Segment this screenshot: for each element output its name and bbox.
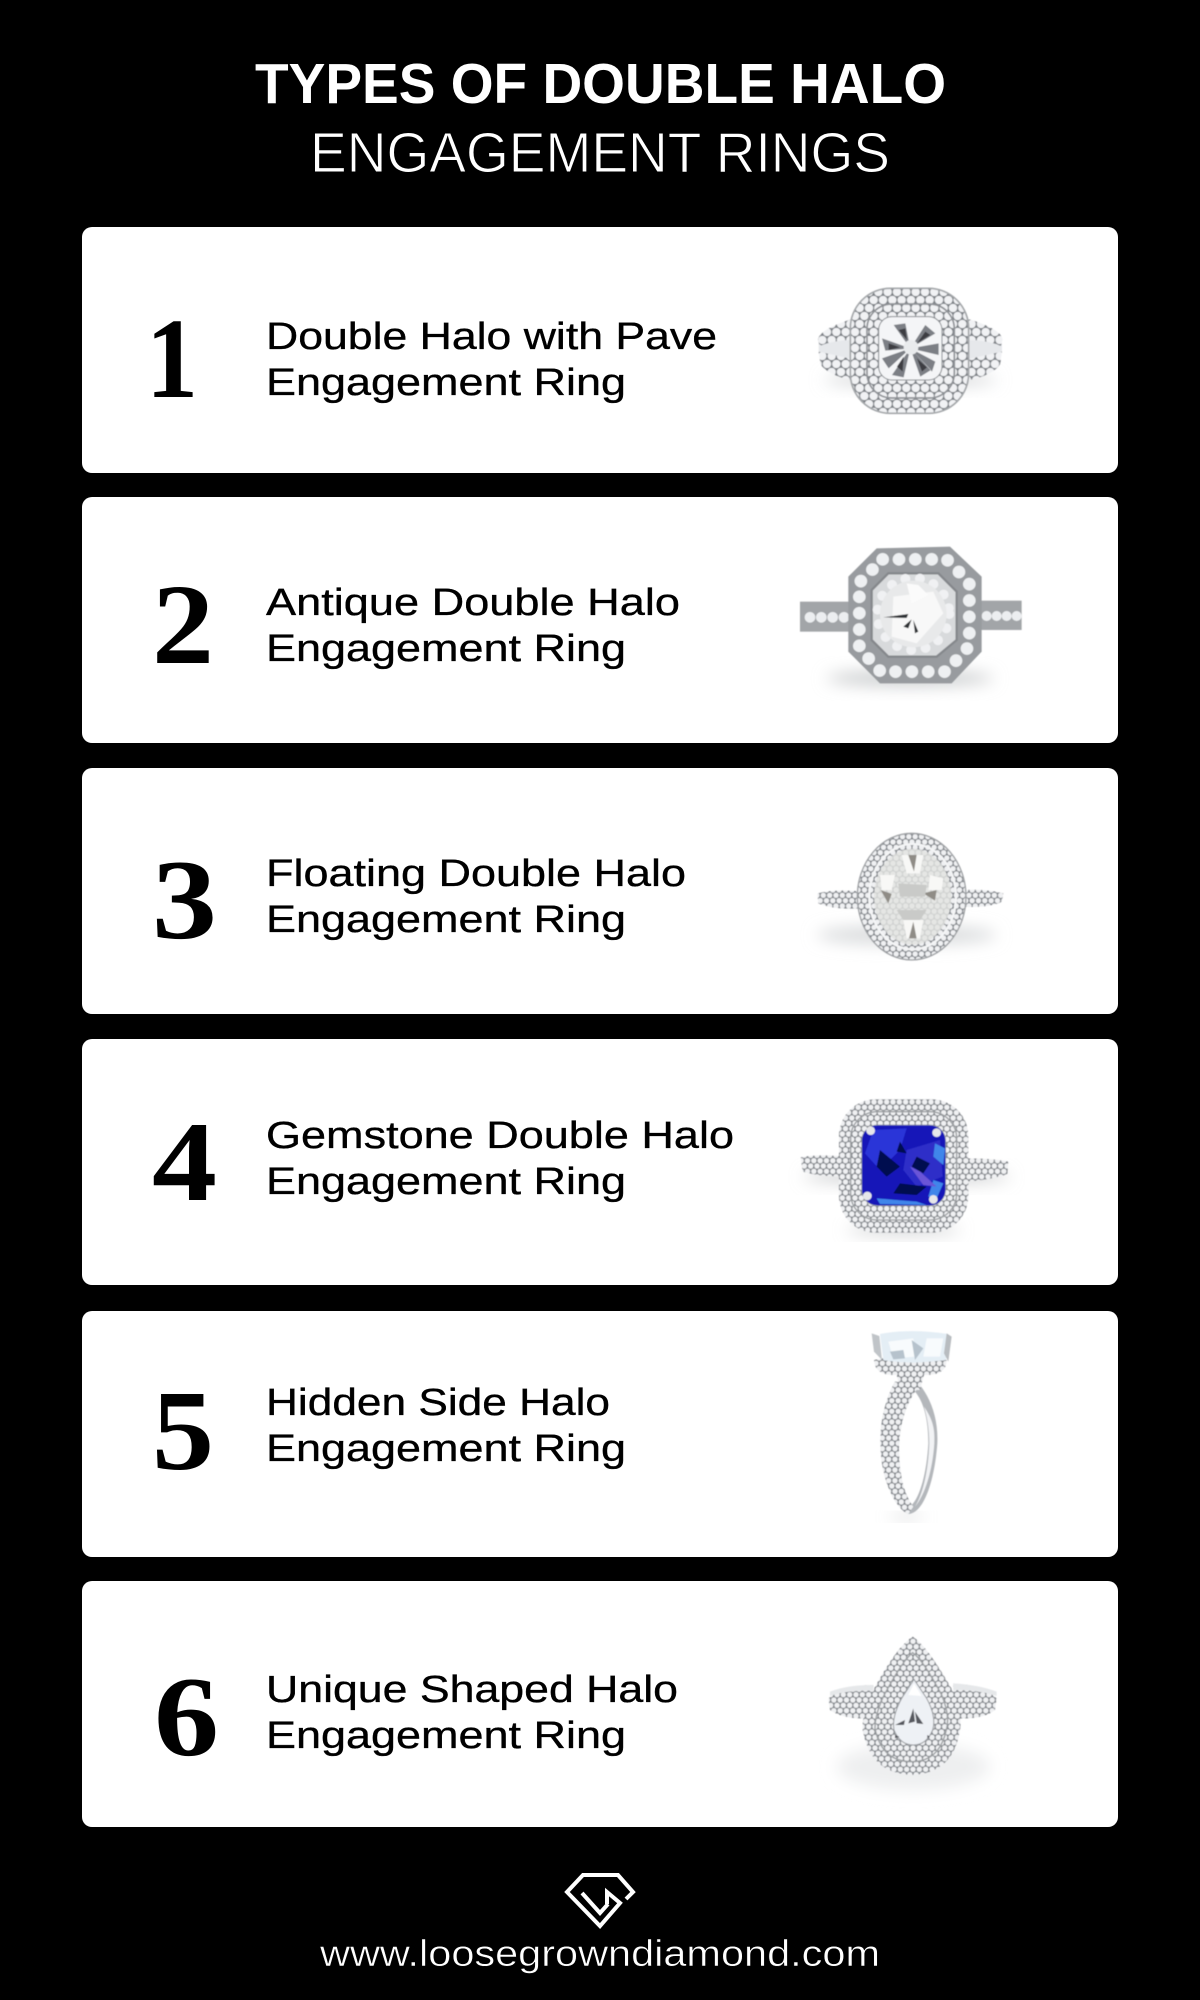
label: unique shaped halo — [266, 1669, 678, 1757]
label: floating double halo: Engagement Ring — [266, 899, 626, 941]
footer website url: www.loosegrowndiamond.com — [319, 1933, 880, 1974]
label: unique shaped halo: Engagement Ring — [266, 1715, 626, 1757]
label: unique shaped halo: Unique Shaped Halo — [266, 1669, 678, 1711]
label: hidden side halo: Hidden Side Halo — [266, 1382, 610, 1424]
label: double halo with pave — [266, 316, 717, 404]
number 1: 1 — [146, 295, 198, 422]
label: hidden side halo — [266, 1382, 626, 1470]
title — [255, 52, 946, 185]
label: gemstone double halo — [266, 1115, 734, 1203]
panel: ring type 2 — [82, 497, 1118, 743]
label: gemstone double halo: Gemstone Double Halo — [266, 1115, 734, 1157]
label: antique double halo — [266, 582, 680, 670]
number 5: 5 — [152, 1367, 214, 1494]
number 2: 2 — [152, 561, 214, 688]
title: TYPES OF DOUBLE HALO — [255, 52, 946, 116]
icon: diamond logo — [567, 1875, 633, 1926]
icon: oval floating halo ring — [817, 833, 1003, 960]
panel: ring type 1 — [82, 227, 1118, 473]
panel: ring type 6 — [82, 1581, 1118, 1827]
number 6: 6 — [154, 1653, 219, 1780]
icon: blue gemstone halo ring — [801, 1099, 1010, 1234]
label: floating double halo — [266, 853, 686, 941]
label: floating double halo: Floating Double Halo — [266, 853, 686, 895]
label: hidden side halo: Engagement Ring — [266, 1428, 626, 1470]
label: gemstone double halo: Engagement Ring — [266, 1161, 626, 1203]
icon: cushion double halo pave ring — [818, 288, 1003, 413]
label: antique double halo: Antique Double Halo — [266, 582, 680, 624]
icon: side view hidden halo ring — [872, 1331, 952, 1519]
label: antique double halo: Engagement Ring — [266, 628, 626, 670]
panel: ring type 4 — [82, 1039, 1118, 1285]
number 4: 4 — [152, 1098, 217, 1225]
panel: ring type 5 — [82, 1311, 1118, 1557]
label: double halo with pave: Double Halo with Pave — [266, 316, 717, 358]
title: ENGAGEMENT RINGS — [310, 121, 890, 185]
icon: antique octagon halo ring — [800, 547, 1022, 686]
number 3: 3 — [152, 836, 217, 963]
label: double halo with pave: Engagement Ring — [266, 362, 626, 404]
panel: ring type 3 — [82, 768, 1118, 1014]
icon: pear shaped halo ring — [828, 1637, 997, 1790]
